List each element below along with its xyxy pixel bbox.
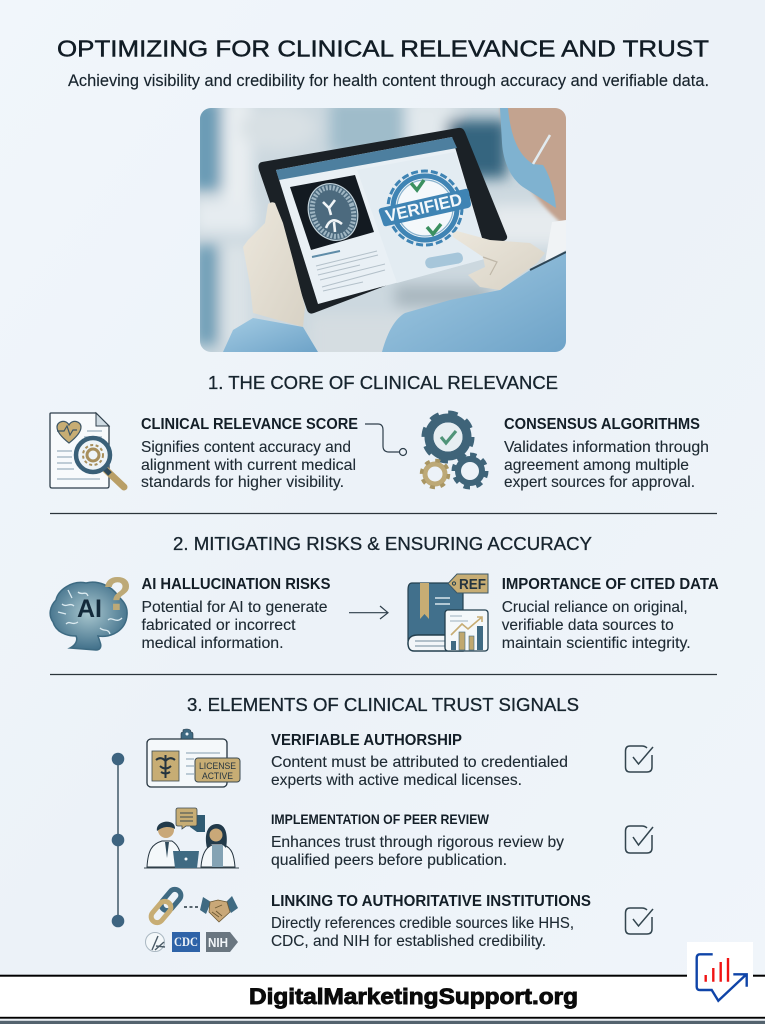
icon: chain, handshake and institution logos: [146, 887, 238, 952]
icon: AI brain with question mark: [50, 567, 132, 650]
text: AI hallucination risks: fabricated or incorrect: [142, 617, 296, 634]
icon: gears with check: [422, 413, 486, 488]
icon: checkbox 1: [626, 746, 653, 772]
photo: clinician holding tablet showing a verified brain scan: [200, 108, 566, 352]
text: importance of cited data: Crucial reliance on original,: [502, 599, 688, 616]
text: AI hallucination risks: medical information.: [142, 635, 284, 652]
verified seal: VERIFIED: [384, 190, 464, 226]
text: authoritative institutions: [271, 893, 591, 950]
text: authoritative institutions: CDC, and NIH for established credibility.: [271, 933, 546, 950]
text: authoritative institutions: Directly references credible sources like HHS,: [271, 915, 574, 932]
gloved hands: [243, 202, 545, 327]
text: verifiable authorship: [271, 732, 568, 789]
icon: checkbox 3: [626, 908, 653, 934]
text: AI hallucination risks: AI HALLUCINATION RISKS: [142, 576, 330, 593]
text: clinical relevance score: standards for higher visibility.: [141, 474, 344, 491]
text: peer review: IMPLEMENTATION OF PEER REVIEW: [271, 811, 490, 827]
text: clinical relevance score: [141, 416, 358, 491]
subtitle: Achieving visibility and credibility for health content through accuracy and verifiable data.: [68, 71, 709, 90]
text: consensus algorithms: expert sources for approval.: [504, 474, 695, 491]
text: verifiable authorship: Content must be attributed to credentialed: [271, 754, 568, 771]
arrow: risks to cited data: [349, 606, 388, 619]
text: consensus algorithms: CONSENSUS ALGORITHMS: [504, 416, 700, 433]
face and mask: [500, 105, 570, 225]
timeline: [112, 753, 124, 927]
tablet: [258, 128, 507, 314]
text: importance of cited data: verifiable data sources to: [502, 617, 674, 634]
text: AI hallucination risks: [142, 576, 330, 652]
logo: chart speech bubble with arrow: [687, 942, 753, 1001]
heading: section 3: 3. ELEMENTS OF CLINICAL TRUST SIGNALS: [187, 694, 579, 715]
icon: license badge: LICENSE: [199, 761, 236, 772]
icon: chain, handshake and institution logos: NIH: [208, 935, 228, 950]
footer band: DigitalMarketingSupport.org: [249, 984, 578, 1009]
icon: AI brain with question mark: AI: [77, 595, 102, 623]
sleeve right: [382, 252, 566, 352]
title: OPTIMIZING FOR CLINICAL RELEVANCE AND TRUST: [57, 36, 709, 62]
text: consensus algorithms: Validates information through: [504, 439, 709, 456]
sleeve left: [223, 318, 318, 352]
icon: AI brain with question mark: ?: [103, 567, 132, 620]
text: verifiable authorship: experts with active medical licenses.: [271, 772, 522, 789]
text: importance of cited data: IMPORTANCE OF CITED DATA: [502, 576, 719, 593]
connector: score to consensus: [365, 424, 406, 456]
text: peer review: qualified peers before publication.: [271, 852, 507, 869]
text: peer review: [271, 811, 564, 869]
text: peer review: Enhances trust through rigorous review by: [271, 834, 564, 851]
icon: document with heart and magnifying glass: [50, 413, 124, 488]
heading: section 1: 1. THE CORE OF CLINICAL RELEVANCE: [208, 372, 558, 393]
text: importance of cited data: maintain scientific integrity.: [502, 635, 691, 652]
text: clinical relevance score: alignment with current medical: [141, 457, 356, 474]
icon: doctors in peer review: [144, 808, 239, 868]
icon: checkbox 2: [626, 826, 653, 853]
icon: license badge: ACTIVE: [202, 771, 233, 782]
text: AI hallucination risks: Potential for AI to generate: [142, 599, 328, 616]
icon: book with REF tag and chart: REF: [459, 577, 486, 593]
text: authoritative institutions: LINKING TO AUTHORITATIVE INSTITUTIONS: [271, 893, 591, 910]
footer band: [0, 975, 765, 1024]
text: clinical relevance score: CLINICAL RELEVANCE SCORE: [141, 416, 358, 433]
heading: section 2: 2. MITIGATING RISKS & ENSURING ACCURACY: [173, 533, 592, 554]
icon: chain, handshake and institution logos: CDC: [174, 935, 198, 949]
icon: book with REF tag and chart: [408, 574, 488, 651]
text: consensus algorithms: agreement among multiple: [504, 457, 689, 474]
text: consensus algorithms: [504, 416, 709, 491]
text: clinical relevance score: Signifies content accuracy and: [141, 439, 351, 456]
verified seal: [379, 171, 471, 245]
text: importance of cited data: [502, 576, 719, 652]
text: verifiable authorship: VERIFIABLE AUTHORSHIP: [271, 732, 462, 749]
icon: license badge: [147, 729, 240, 787]
